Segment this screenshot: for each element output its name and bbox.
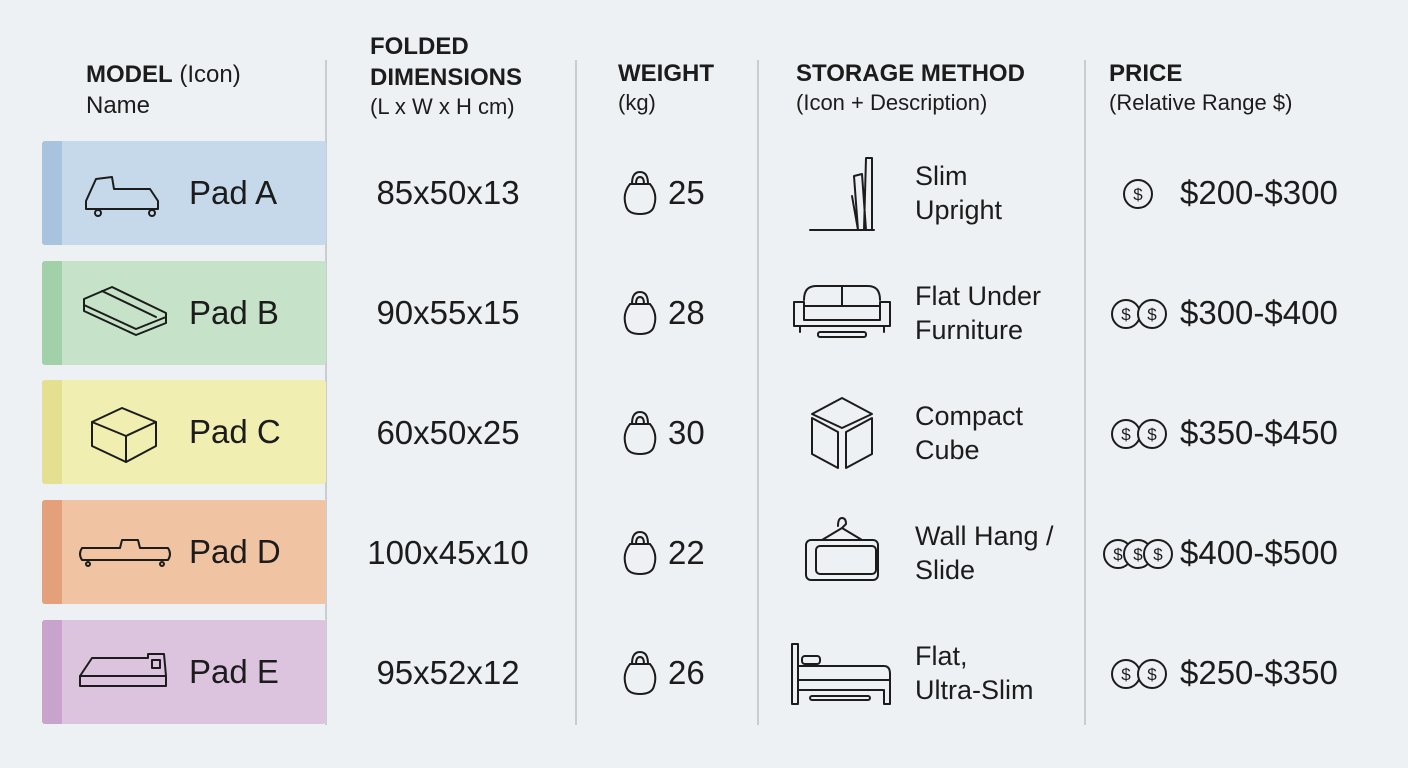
icon: wall hang xyxy=(805,517,879,581)
storage methods: Flat Under xyxy=(915,281,1041,311)
storage methods xyxy=(791,157,1054,705)
weights xyxy=(624,171,705,695)
header: folded dimensions xyxy=(370,33,522,119)
prices: $ xyxy=(1133,545,1143,564)
icon: sofa xyxy=(793,285,891,338)
row D model xyxy=(42,500,326,604)
weights: 22 xyxy=(668,534,705,571)
row C model xyxy=(42,380,326,484)
coins 2: $ xyxy=(1147,305,1157,324)
storage methods: Compact xyxy=(915,401,1023,431)
icon: pad D xyxy=(79,539,171,567)
row E model: Pad E xyxy=(189,653,279,690)
weights: 25 xyxy=(668,174,705,211)
icon: cube xyxy=(811,397,873,469)
header: price: PRICE xyxy=(1109,60,1182,87)
header: storage: STORAGE METHOD xyxy=(796,60,1025,87)
row D model: Pad D xyxy=(189,533,281,570)
text: 90x55x15 xyxy=(376,294,520,331)
storage methods: Flat, xyxy=(915,641,968,671)
weights: 28 xyxy=(668,294,705,331)
header: weight: (kg) xyxy=(618,90,656,115)
text: 95x52x12 xyxy=(376,654,520,691)
prices: $ xyxy=(1121,425,1131,444)
storage methods: Furniture xyxy=(915,315,1023,345)
text: 100x45x10 xyxy=(367,534,529,571)
header: model: Name xyxy=(86,92,150,119)
header: model xyxy=(86,61,241,119)
row E model xyxy=(42,620,326,724)
coins 2: $ xyxy=(1121,305,1131,324)
header: model: MODEL (Icon) xyxy=(86,61,241,88)
prices: $250-$350 xyxy=(1180,654,1338,691)
icon: upright xyxy=(809,157,875,231)
weights: 26 xyxy=(668,654,705,691)
prices: $ xyxy=(1121,665,1131,684)
header: folded dimensions: (L x W x H cm) xyxy=(370,94,515,119)
row C model: Pad C xyxy=(189,413,281,450)
prices: $300-$400 xyxy=(1180,294,1338,331)
header: storage: (Icon + Description) xyxy=(796,90,987,115)
header: price: (Relative Range $) xyxy=(1109,90,1292,115)
prices: $200-$300 xyxy=(1180,174,1338,211)
dimensions xyxy=(367,174,529,691)
text: 60x50x25 xyxy=(376,414,520,451)
storage methods: Slide xyxy=(915,555,975,585)
header: storage xyxy=(796,60,1025,115)
prices: $ xyxy=(1153,545,1163,564)
row A model xyxy=(42,141,326,245)
icon: pad B xyxy=(83,286,167,336)
row B model xyxy=(42,261,326,365)
coins 2 xyxy=(1111,299,1167,329)
coin 1: $ xyxy=(1133,185,1143,204)
header: folded dimensions: DIMENSIONS xyxy=(370,64,522,91)
prices: $400-$500 xyxy=(1180,534,1338,571)
weights: 30 xyxy=(668,414,705,451)
prices: $ xyxy=(1113,545,1123,564)
row B model: Pad B xyxy=(189,294,279,331)
icon: pad C xyxy=(91,407,157,463)
header: weight: WEIGHT xyxy=(618,60,714,87)
storage methods: Upright xyxy=(915,195,1002,225)
row A model: Pad A xyxy=(189,174,277,211)
header: price xyxy=(1109,60,1292,115)
prices xyxy=(1103,174,1338,691)
icon: pad E xyxy=(79,653,167,687)
icon: bed xyxy=(791,643,891,705)
icon: pad A xyxy=(85,176,159,217)
header: weight xyxy=(618,60,714,115)
header: folded dimensions: FOLDED xyxy=(370,33,469,60)
storage methods: Cube xyxy=(915,435,980,465)
storage methods: Wall Hang / xyxy=(915,521,1054,551)
storage methods: Slim xyxy=(915,161,968,191)
storage methods: Ultra-Slim xyxy=(915,675,1034,705)
coin 1 xyxy=(1123,179,1153,209)
text: 85x50x13 xyxy=(376,174,520,211)
prices: $ xyxy=(1147,425,1157,444)
prices: $ xyxy=(1147,665,1157,684)
prices: $350-$450 xyxy=(1180,414,1338,451)
